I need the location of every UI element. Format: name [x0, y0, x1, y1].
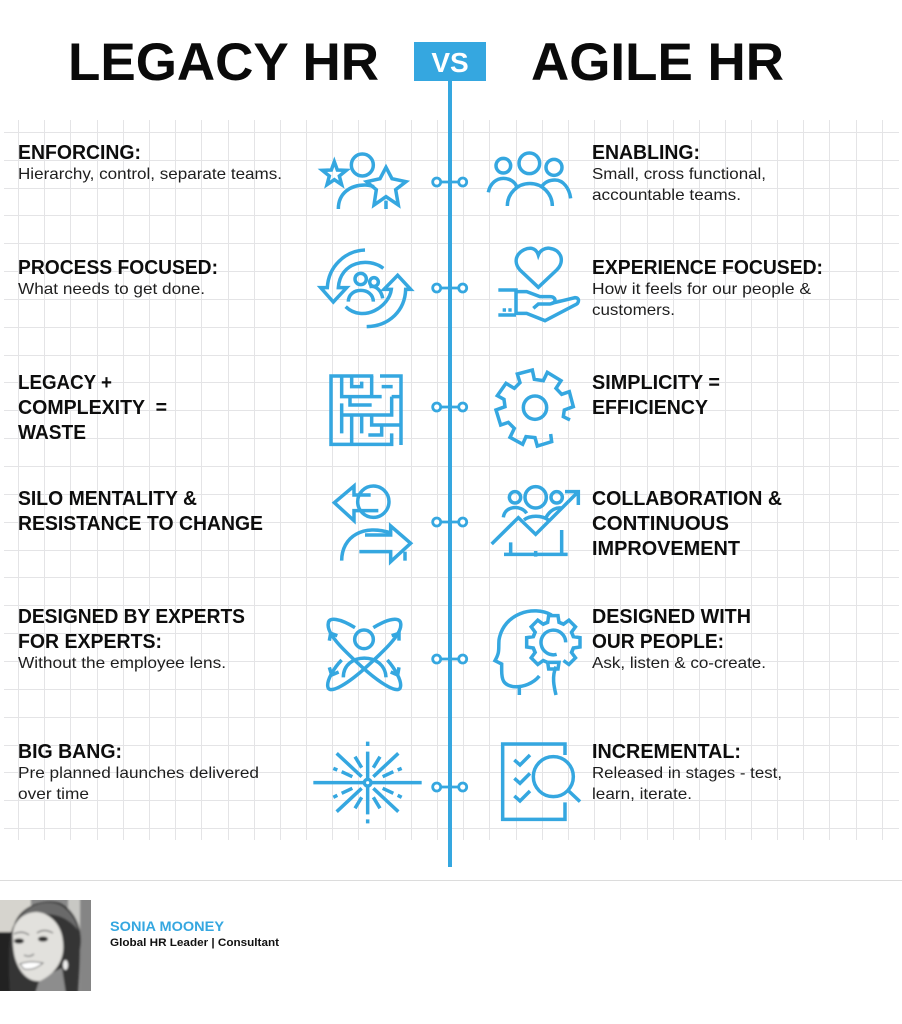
- icon: heart in hand: [498, 248, 579, 321]
- author name and role: [110, 918, 279, 949]
- text: Legacy + complexity = waste: COMPLEXITY =: [18, 397, 167, 419]
- text: Collaboration: CONTINUOUS: [592, 513, 729, 535]
- text: Process focused: PROCESS FOCUSED:: [18, 257, 218, 279]
- icon: maze: [331, 376, 401, 445]
- author photo: [0, 897, 94, 994]
- text: Process focused: [18, 257, 218, 298]
- text: Big bang: [18, 741, 259, 803]
- author name and role: SONIA MOONEY: [110, 918, 225, 934]
- text: Enabling: accountable teams.: [592, 187, 741, 204]
- icon: cycle arrows with people: [321, 250, 411, 327]
- text: Experience focused: [592, 257, 823, 319]
- icon: person with stars: [322, 154, 406, 209]
- title: Agile HR: AGILE HR: [531, 33, 784, 92]
- text: Silo mentality: [18, 488, 263, 535]
- text: Silo mentality: RESISTANCE TO CHANGE: [18, 513, 263, 535]
- text: Designed with our people: OUR PEOPLE:: [592, 631, 724, 653]
- text: Legacy + complexity = waste: [18, 372, 167, 444]
- text: Experience focused: How it feels for our people &: [592, 281, 811, 298]
- icon: head with gear: [495, 611, 580, 695]
- author name and role: Global HR Leader | Consultant: [110, 937, 279, 949]
- icon: crossing orbits with person: [328, 619, 401, 690]
- footer divider: [0, 880, 902, 881]
- text: Big bang: Pre planned launches delivered: [18, 765, 259, 782]
- icon: gear with gap: [496, 370, 573, 446]
- text: Enabling: Small, cross functional,: [592, 166, 766, 183]
- text: Experience focused: customers.: [592, 302, 675, 319]
- icon: starburst: [313, 742, 422, 823]
- text: Designed with our people: DESIGNED WITH: [592, 606, 751, 628]
- text: Enforcing: [18, 142, 282, 183]
- text: Enforcing: Hierarchy, control, separate teams.: [18, 166, 282, 183]
- text: Designed by experts: FOR EXPERTS:: [18, 631, 162, 653]
- text: Designed by experts: [18, 606, 245, 672]
- timeline connectors: [433, 178, 467, 791]
- text: Legacy + complexity = waste: WASTE: [18, 422, 86, 444]
- text: Silo mentality: SILO MENTALITY &: [18, 488, 197, 510]
- text: Incremental: learn, iterate.: [592, 786, 692, 803]
- icon: opposing arrows with circle: [334, 486, 411, 562]
- text: Enforcing: ENFORCING:: [18, 142, 141, 164]
- text: Incremental: INCREMENTAL:: [592, 741, 741, 763]
- text: Big bang: over time: [18, 786, 89, 803]
- text: Big bang: BIG BANG:: [18, 741, 122, 763]
- icon: team with rising arrow: [492, 487, 578, 557]
- icon: checklist with magnifier: [503, 744, 580, 819]
- text: Collaboration: IMPROVEMENT: [592, 538, 740, 560]
- central timeline line: [448, 80, 452, 867]
- text: Incremental: Released in stages - test,: [592, 765, 782, 782]
- VS badge: VS: [431, 47, 469, 78]
- text: Simplicity = efficiency: EFFICIENCY: [592, 397, 709, 419]
- text: Designed by experts: Without the employee lens.: [18, 655, 226, 672]
- text: Collaboration: COLLABORATION &: [592, 488, 782, 510]
- text: Legacy + complexity = waste: LEGACY +: [18, 372, 112, 394]
- text: Simplicity = efficiency: [592, 372, 720, 419]
- text: Incremental: [592, 741, 782, 803]
- text: Enabling: [592, 142, 766, 204]
- text: Enabling: ENABLING:: [592, 142, 700, 164]
- text: Designed with our people: [592, 606, 766, 672]
- text: Experience focused: EXPERIENCE FOCUSED:: [592, 257, 823, 279]
- title: Legacy HR: LEGACY HR: [68, 33, 379, 92]
- text: Designed with our people: Ask, listen & co-create.: [592, 655, 766, 672]
- text: Designed by experts: DESIGNED BY EXPERTS: [18, 606, 245, 628]
- text: Simplicity = efficiency: SIMPLICITY =: [592, 372, 720, 394]
- icon: team of three: [488, 153, 571, 206]
- text: Process focused: What needs to get done.: [18, 281, 205, 298]
- VS badge: [414, 42, 486, 81]
- text: Collaboration: [592, 488, 782, 560]
